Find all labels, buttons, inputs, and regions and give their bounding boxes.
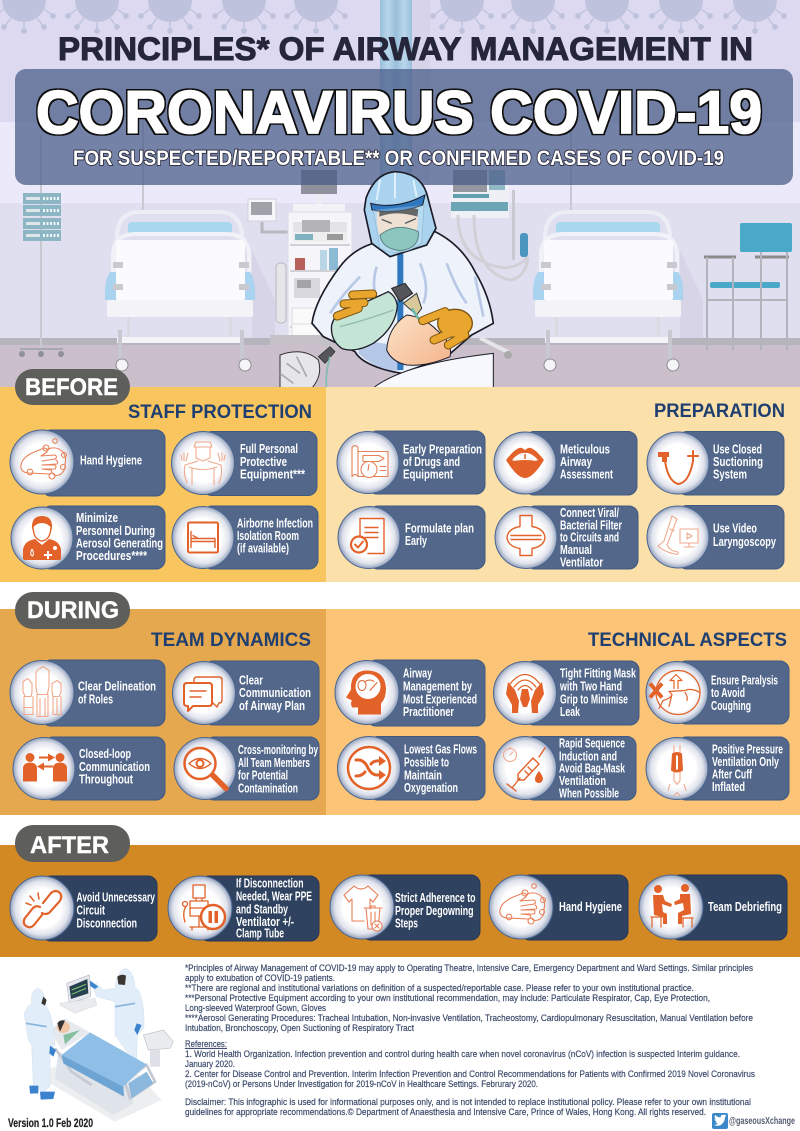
hospital bed right [533,122,703,371]
icon: open mouth [506,448,544,478]
label: AFTER [15,825,130,862]
text: Communication [79,760,150,774]
icon: bed in a room [188,522,218,552]
icon: stopwatch and syringe [504,747,545,791]
text [405,522,474,548]
text: Airway [403,666,432,680]
panel: technical aspects [326,609,800,815]
text: Clear Delineation [78,680,156,694]
heading: team dynamics: TEAM DYNAMICS [151,629,311,651]
text [239,674,311,713]
text: Inflated [712,780,745,794]
text: Connect Viral/ [560,506,619,520]
reservoir bag [318,347,335,363]
text [713,442,763,482]
text: Hand Hygiene [559,900,622,914]
card: closed-loop communication [13,737,165,800]
text: Strict Adherence to [395,891,476,905]
references [185,1039,755,1090]
text: of Airway Plan [239,699,305,713]
icon: shuffle arrows [348,747,390,789]
text: Throughout [79,773,134,787]
patient head [387,315,451,365]
text: Proper Degowning [395,904,474,918]
text: Equipment [403,468,454,482]
text: to Avoid [711,686,745,700]
text: for Potential [238,769,288,783]
text: Avoid Bag-Mask [559,762,625,776]
ventilator [451,170,528,359]
card: formulate plan [338,506,485,569]
card: positive pressure ventilation [646,737,789,800]
card: team debriefing [639,875,787,940]
panel: after [0,845,800,957]
card: rapid sequence induction [494,736,636,801]
icon: no coughing [650,670,700,714]
text: of Roles [78,693,113,707]
mattress [62,1032,147,1087]
hood [364,172,436,257]
text [560,506,622,570]
text: Airway [560,455,592,469]
references: References: [185,1039,227,1050]
bed frame [55,1052,133,1115]
text [76,511,163,563]
card: full PPE [172,432,317,496]
text [403,666,477,719]
section: BEFORE [0,369,800,582]
text [76,890,155,930]
references: (2019-nCoV) or Persons Under Investigation for 2019-nCoV in Healthcare Settings. Februrary 2020. [185,1079,538,1090]
right glove [423,309,472,345]
card: ensure paralysis [646,661,789,724]
label: DURING [15,592,130,629]
valve and bag [392,283,413,302]
card: degowning [330,875,480,940]
text: Isolation Room [237,529,299,543]
text: Tight Fitting Mask [560,666,636,680]
visor [371,195,425,212]
card: experienced practitioner [335,660,485,726]
text [403,442,482,482]
card: airway assessment [494,432,637,495]
version note: Version 1.0 Feb 2020 [8,1118,93,1130]
text [713,522,776,549]
face [376,212,418,236]
doctor in PPE ventilating a patient [280,172,493,390]
text: Clamp Tube [236,927,284,941]
text: Formulate plan [405,522,474,536]
text: If Disconnection [236,877,304,891]
banner panel [15,69,793,185]
icon: cuffed tube [668,746,686,796]
text: Laryngoscopy [713,535,776,549]
label: DURING: DURING [27,597,119,624]
patient [50,1018,90,1050]
text: Cross-monitoring by [238,743,318,757]
card: hand hygiene [489,875,628,940]
text: Practitioner [403,705,454,719]
footnotes: Long-sleeved Waterproof Gown, Gloves [185,1003,326,1014]
text: Ventilation [559,774,606,788]
label: AFTER: AFTER [30,832,109,859]
text: Full Personal [240,442,298,456]
text [711,674,778,713]
text: Use Closed [713,442,762,456]
heading: staff protection: STAFF PROTECTION [128,401,312,423]
icon: hands holding mask [506,674,544,713]
text: Ventilator +/- [236,915,294,929]
card: hand hygiene [10,430,165,496]
text: Oxygenation [404,781,458,795]
card: closed suctioning [647,432,784,495]
card: early preparation [337,431,485,494]
text: Steps [395,916,418,930]
text [560,442,614,482]
icon: suction tube [658,451,698,484]
text: Hand Hygiene [80,454,142,468]
text [240,442,305,482]
card: if disconnection needed [168,876,319,941]
icon: gown and bin [344,886,382,931]
icon: twitter [712,1113,728,1129]
text: to Circuits and [560,531,619,545]
icon: broken chain link [24,891,61,927]
footnotes: **There are regional and institutional variations on definition of a suspected/reportable case. Please refer to your own institutional practice. [185,983,694,994]
text: Minimize [76,511,118,525]
text: Leak [560,705,580,719]
card: communication of plan [172,661,319,725]
text: Suctioning [713,455,763,469]
text: System [713,468,747,482]
text: Manual [560,543,592,557]
text: Most Experienced [403,692,477,706]
footnotes: apply to extubation of COVID-19 patients. [185,973,335,984]
suit [312,232,493,373]
IV pole with infusion pumps [19,135,64,357]
text: Disconnection [76,916,137,930]
text: All Team Members [238,756,310,770]
text: Lowest Gas Flows [404,742,477,756]
footnotes: Intubation, Bronchoscopy, Open Suctioning of Respiratory Tract [185,1023,414,1034]
text: Needed, Wear PPE [236,889,312,903]
card: tight fitting mask [494,661,639,725]
heading: preparation: PREPARATION [654,400,785,422]
text: Equipment*** [240,468,305,482]
background: hospital ward scene [0,0,800,387]
text [559,666,636,719]
references: January 2020. [185,1059,235,1070]
text: Contamination [238,782,298,796]
panel: team dynamics [0,609,326,815]
text: Early Preparation [403,442,482,456]
text: Early [405,534,427,548]
text [79,747,150,787]
icon: person in PPE [181,442,225,485]
text: Grip to Minimise [560,692,628,706]
text: Communication [239,686,311,700]
text: Closed-loop [79,747,131,761]
text [404,742,477,795]
text: Circuit [76,904,106,918]
icon: washing hands [500,884,546,924]
text: Clear [239,674,263,688]
text: When Possible [559,787,619,801]
icon: plan and clock [352,446,388,478]
icon: head with airway [346,670,386,714]
panel: staff protection [0,387,326,582]
right staff member [92,968,144,1058]
icon: raised hands [23,666,61,716]
text: and Standby [236,902,288,916]
text: (if available) [237,542,289,556]
icon: viral filter [507,516,545,556]
disclaimer [185,1097,751,1118]
section: AFTER [0,825,800,957]
text: Management by [403,680,472,694]
text: Aerosol Generating [76,536,163,550]
footnotes: ***Personal Protective Equipment according to your own institutional recommendation, may include: Particulate Respirator, Cap, Eye Protection, [185,993,710,1004]
card: airborne isolation room [172,506,318,569]
card: delineation of roles [10,660,165,726]
text [236,877,312,941]
illustration: ICU bed with staff in PPE [24,968,173,1122]
icon: two people with arrows [23,753,67,782]
text: Procedures**** [76,549,147,563]
text: Possible to [404,756,449,770]
icon: ventilator with pause [182,885,225,930]
main heading: CORONAVIRUS COVID-19 [36,79,762,146]
text: Coughing [711,699,751,713]
heading: technical aspects: TECHNICAL ASPECTS [588,629,787,651]
title: PRINCIPLES* OF AIRWAY MANAGEMENT IN [58,31,753,67]
card: avoid disconnection [10,876,157,941]
footnotes [185,963,753,1034]
text [237,516,313,556]
text: Protective [240,455,287,469]
icon: video laryngoscope [658,516,698,554]
subtitle: FOR SUSPECTED/REPORTABLE** OR CONFIRMED CASES OF COVID-19 [73,146,724,170]
text: Airborne Infection [237,516,313,530]
left staff member [24,988,55,1092]
text [559,736,625,801]
text [712,742,783,794]
icon: magnifier with eye [184,748,226,788]
text [238,743,318,796]
mask [380,227,418,251]
text: Use Video [713,522,757,536]
text: After Cuff [712,768,753,782]
icon: washing hands [21,439,66,479]
text: Rapid Sequence [559,736,625,750]
monitor [67,975,91,1003]
text: Bacterial Filter [560,518,622,532]
left glove fingers [337,294,373,316]
text: Avoid Unnecessary [76,890,155,904]
text: Maintain [404,768,442,782]
text: Ventilator [560,556,603,570]
icon: checklist [351,518,384,554]
card: video laryngoscopy [647,506,784,569]
hospital bed left [105,122,275,371]
equipment cart with monitors [248,170,352,345]
icon: speech bubbles [184,677,222,711]
text: with Two Hand [559,680,622,694]
panel: preparation [326,387,800,582]
icon: doctor [23,516,61,560]
section: DURING [0,592,800,815]
side unit [143,1030,173,1050]
text [395,891,476,930]
card: cross-monitoring [174,737,319,800]
text: Personnel During [76,524,155,538]
card: viral filter [495,506,638,570]
sheet [375,353,493,388]
text [78,680,156,707]
label: BEFORE [15,369,130,405]
card: minimize personnel [11,506,165,569]
icon: two seated people [651,884,693,927]
text: Induction and [559,750,617,764]
text: Meticulous [560,442,610,456]
label: BEFORE: BEFORE [25,374,118,401]
chair [704,223,792,350]
text: of Drugs and [403,455,460,469]
text: Assessment [560,468,614,482]
disclaimer: guidelines for appropriate recommendations.© Department of Anaesthesia and Intensive Care, Prince of Wales, Hong Kong. All rights reserved. [185,1107,706,1118]
card: lowest gas flows [338,736,485,800]
